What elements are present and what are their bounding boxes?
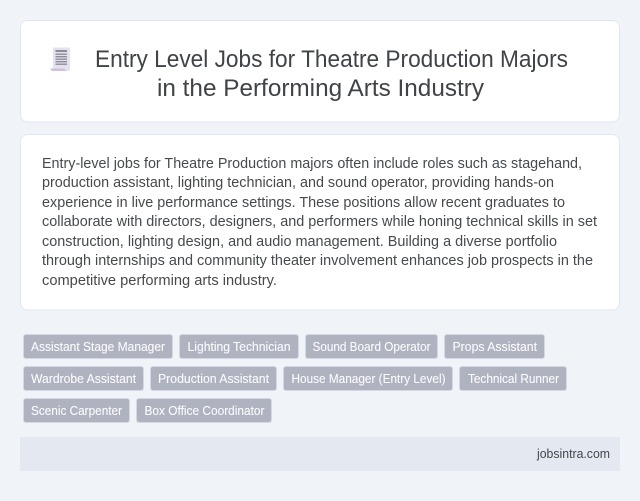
tag: Wardrobe Assistant: Wardrobe Assistant (31, 371, 136, 386)
description panel (20, 134, 620, 310)
footer source text: jobsintra.com (536, 446, 610, 461)
description text: Entry-level jobs for Theatre Production majors often include roles such as stagehand, (42, 155, 582, 172)
tag: Production Assistant: Production Assistant (158, 371, 269, 386)
description text: competitive performing arts industry. (42, 272, 277, 289)
title (95, 46, 568, 102)
header panel (20, 20, 620, 122)
title: in the Performing Arts Industry (157, 75, 485, 102)
tag: Technical Runner (460, 366, 566, 390)
description text: through internships and community theater involvement enhances job prospects in the (42, 252, 593, 269)
tag: Sound Board Operator (306, 334, 438, 358)
description text (42, 155, 598, 289)
description text: production assistant, lighting technician, and sound operator, providing hands-on (42, 174, 554, 191)
tag: Technical Runner: Technical Runner (468, 371, 560, 386)
tag: Lighting Technician (180, 334, 298, 358)
tag: Wardrobe Assistant (24, 366, 144, 390)
job tags (24, 334, 566, 422)
tag: Scenic Carpenter: Scenic Carpenter (31, 403, 123, 418)
tag: Sound Board Operator: Sound Board Operator (312, 339, 431, 354)
tag: Assistant Stage Manager: Assistant Stage Manager (31, 339, 166, 354)
description text: construction, lighting design, and audio management. Building a diverse portfolio (42, 233, 557, 250)
title: Entry Level Jobs for Theatre Production Majors (95, 46, 568, 73)
tag: Assistant Stage Manager (24, 334, 172, 358)
tag: Production Assistant (150, 366, 276, 390)
description text: experience in live performance settings. These positions allow recent graduates to (42, 194, 565, 211)
tag: Lighting Technician: Lighting Technician (188, 339, 290, 354)
tag: Box Office Coordinator: Box Office Coordinator (144, 403, 265, 418)
tag: Scenic Carpenter (24, 398, 130, 422)
tag: House Manager (Entry Level): House Manager (Entry Level) (292, 371, 446, 386)
description text: collaborate with directors, designers, and performers while honing technical skills in set (42, 213, 598, 230)
tag: Props Assistant: Props Assistant (452, 339, 537, 354)
footer bar (20, 437, 620, 471)
tag: House Manager (Entry Level) (284, 366, 452, 390)
icon: script scroll (50, 48, 70, 71)
tag: Box Office Coordinator (136, 398, 272, 422)
tag: Props Assistant (444, 334, 544, 358)
